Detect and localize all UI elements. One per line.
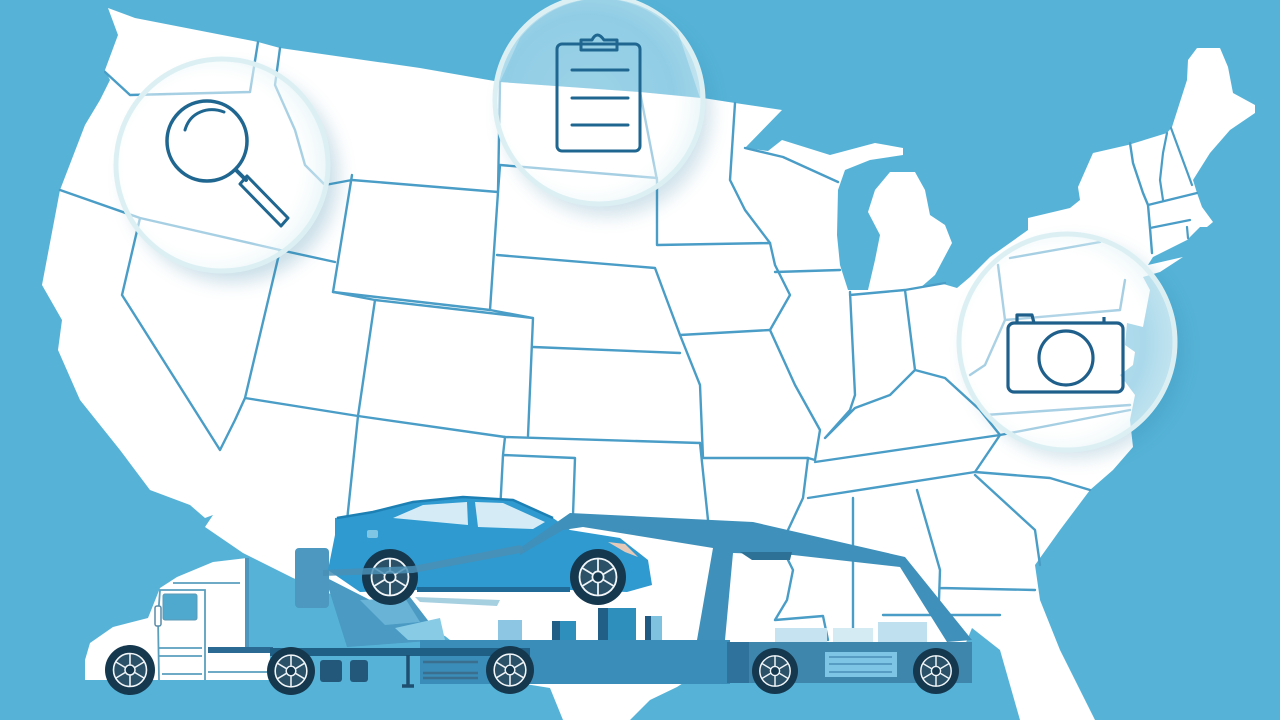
lens: vehicle photo camera xyxy=(959,234,1183,458)
lens: inspection magnifier xyxy=(116,59,338,282)
state border lines xyxy=(60,42,1197,640)
lens: clipboard checklist xyxy=(495,0,711,216)
icon: clipboard xyxy=(557,35,640,151)
icon: magnifying glass xyxy=(167,101,288,226)
trailer chassis and deck xyxy=(270,640,972,686)
tractor cab xyxy=(85,558,273,680)
ramp and rear loading box xyxy=(295,548,500,647)
car on upper deck xyxy=(328,497,652,605)
carrier upper beam and column xyxy=(323,513,972,642)
car carrier truck xyxy=(85,497,972,695)
truck wheels xyxy=(105,645,959,695)
cargo boxes on deck xyxy=(498,608,927,642)
icon: camera xyxy=(1008,315,1123,392)
sea tint inside lens xyxy=(500,0,700,98)
